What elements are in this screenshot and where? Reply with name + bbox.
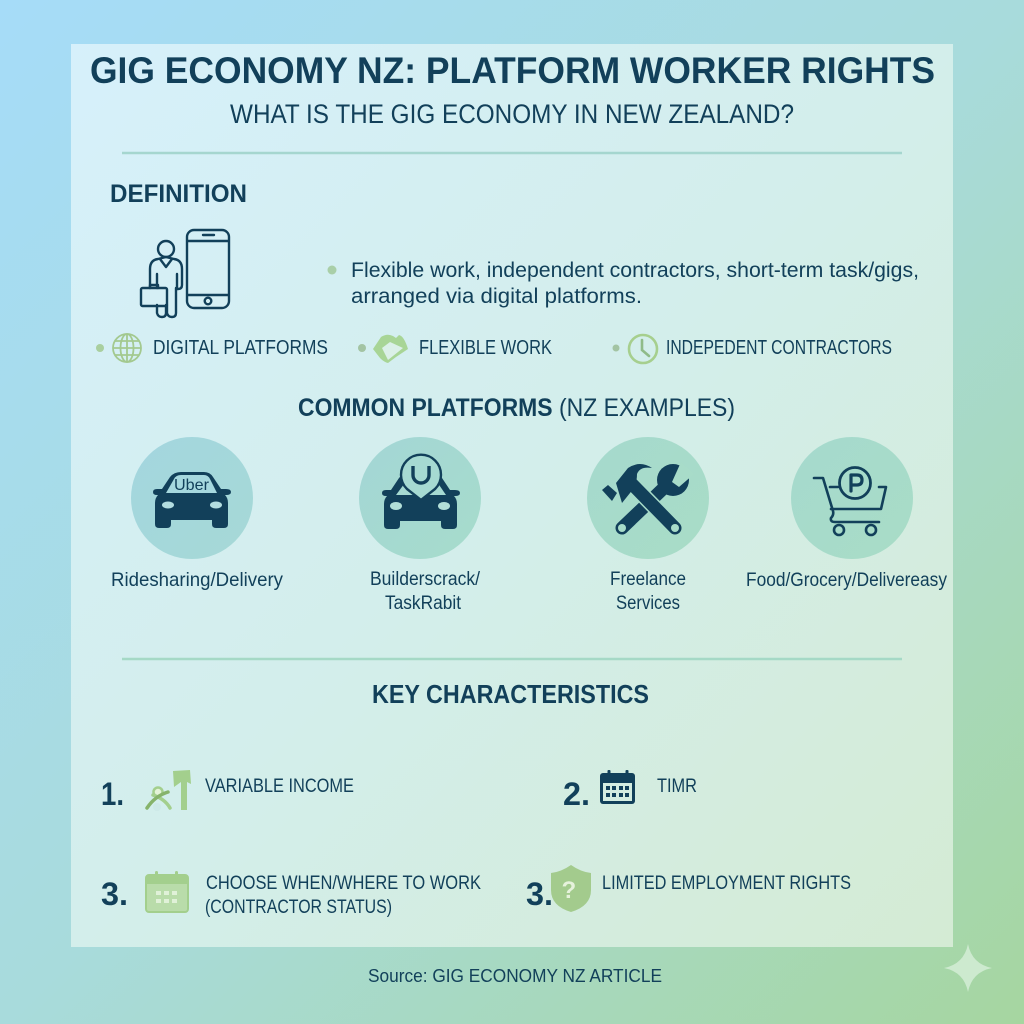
feature: flexible work [358, 334, 553, 363]
icon: person and up arrow [147, 770, 191, 811]
icon: clock [629, 335, 657, 363]
feature: independent contractors: INDEPEDENT CONTRACTORS [666, 337, 892, 359]
panel: main card [71, 44, 953, 947]
icon: sparkle [944, 944, 992, 992]
characteristic 3: choose when and where: (CONTRACTOR STATUS) [205, 897, 392, 918]
characteristic 4: limited employment rights: LIMITED EMPLOYMENT RIGHTS [602, 873, 851, 894]
icon: calendar [600, 770, 635, 804]
label: Freelance [610, 569, 686, 590]
heading: key characteristics: KEY CHARACTERISTICS [372, 679, 649, 709]
feature: independent contractors [612, 335, 892, 363]
label: Ridesharing/Delivery [111, 569, 283, 591]
definition bullet text [328, 259, 919, 308]
characteristic 3: choose when and where [101, 871, 481, 918]
platform: food delivery [746, 437, 947, 591]
characteristic 2: TIMR: TIMR [657, 776, 697, 797]
icon: handshake heart [373, 334, 408, 363]
characteristic 3: choose when and where: CHOOSE WHEN/WHERE TO WORK [206, 873, 481, 894]
icon: shield with question mark [551, 865, 591, 912]
source note: Source: GIG ECONOMY NZ ARTICLE [368, 965, 662, 986]
feature: flexible work: FLEXIBLE WORK [419, 337, 553, 359]
icon: shield with question mark: ? [562, 877, 576, 904]
characteristic 2: TIMR: 2. [563, 776, 590, 812]
label [610, 569, 686, 614]
icon: car with location pin [382, 455, 460, 529]
heading: definition: DEFINITION [110, 180, 247, 208]
icon: hammer and wrench [602, 462, 694, 532]
characteristic 4: limited employment rights: 3. [526, 876, 553, 912]
label: Builderscrack/ [370, 569, 481, 590]
platform: freelance services [587, 437, 709, 614]
platform: builderscrack [359, 437, 481, 614]
heading: common platforms: COMMON PLATFORMS (NZ EXAMPLES) [298, 394, 735, 422]
characteristic 4: limited employment rights [526, 865, 851, 912]
icon: green calendar [146, 871, 188, 912]
characteristic 1: variable income: VARIABLE INCOME [205, 776, 354, 797]
platform: ridesharing [111, 437, 283, 591]
feature: digital platforms: DIGITAL PLATFORMS [153, 337, 328, 359]
label: TaskRabit [385, 593, 462, 614]
icon: Uber car [153, 472, 231, 528]
label [370, 569, 481, 614]
label: Food/Grocery/Delivereasy [746, 570, 947, 591]
icon: Uber car: Uber [174, 477, 210, 494]
label: Services [616, 593, 680, 614]
characteristic 2: TIMR [563, 770, 697, 812]
definition bullet text: Flexible work, independent contractors, short-term task/gigs, [351, 259, 919, 282]
icon: worker with smartphone [141, 230, 229, 317]
title: GIG ECONOMY NZ: PLATFORM WORKER RIGHTS [90, 50, 935, 91]
characteristic 1: variable income: 1. [101, 776, 124, 812]
icon: globe [113, 334, 141, 362]
definition bullet text: arranged via digital platforms. [351, 285, 642, 308]
subtitle: WHAT IS THE GIG ECONOMY IN NEW ZEALAND? [230, 99, 794, 129]
feature: digital platforms [96, 334, 328, 362]
icon: shopping cart with P coin [814, 468, 886, 535]
characteristic 3: choose when and where: 3. [101, 876, 128, 912]
characteristic 1: variable income [101, 770, 354, 812]
